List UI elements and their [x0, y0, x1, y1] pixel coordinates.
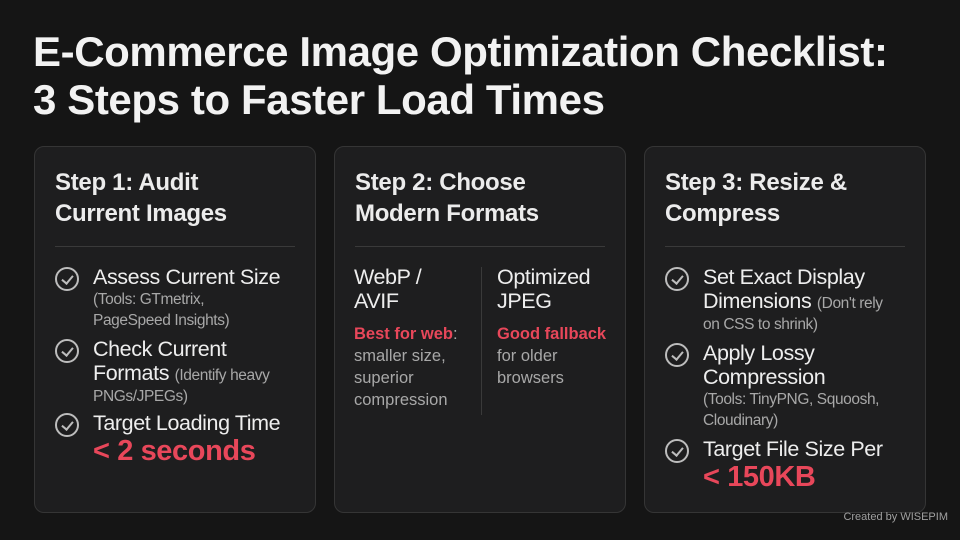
column: webp/avif: Best for web:	[354, 325, 458, 343]
step 3 heading: Compress	[665, 200, 780, 227]
column: optimized jpeg: browsers	[497, 369, 564, 387]
column: optimized jpeg: Good fallback	[497, 325, 606, 343]
item: target file size: < 150KB	[703, 461, 815, 493]
column: webp/avif: smaller size,	[354, 347, 446, 365]
column: optimized jpeg: JPEG	[497, 289, 552, 313]
item: check formats: Formats (Identify heavy	[93, 361, 269, 385]
step 2 heading: Modern Formats	[355, 200, 539, 227]
item: lossy compression: Compression	[703, 365, 825, 389]
column: optimized jpeg: Optimized	[497, 265, 590, 289]
item: target loading time: < 2 seconds	[93, 435, 255, 467]
item: assess size	[55, 265, 280, 329]
item: check formats	[55, 337, 270, 405]
item: assess size: PageSpeed Insights)	[93, 312, 229, 329]
column: webp/avif: AVIF	[354, 289, 399, 313]
column: webp/avif: compression	[354, 391, 448, 409]
column: optimized jpeg: for older	[497, 347, 558, 365]
panel: step 1	[34, 146, 316, 513]
column: optimized jpeg	[497, 265, 606, 387]
item: assess size: (Tools: GTmetrix,	[93, 291, 204, 308]
step 1 heading: Step 1: Audit	[55, 169, 198, 196]
item: target loading time: Target Loading Time	[93, 411, 280, 435]
step 1 heading	[55, 169, 227, 227]
step 2 heading: Step 2: Choose	[355, 169, 526, 196]
item: lossy compression: Apply Lossy	[703, 341, 815, 365]
item: check formats: Check Current	[93, 337, 226, 361]
item: display dimensions: Dimensions (Don't rely	[703, 289, 883, 313]
step 3 heading	[665, 169, 847, 227]
step 2 heading	[355, 169, 539, 227]
title	[33, 28, 888, 123]
item: target loading time	[55, 411, 280, 467]
column: webp/avif	[354, 265, 458, 409]
item: target file size: Target File Size Per	[703, 437, 883, 461]
item: display dimensions: on CSS to shrink)	[703, 316, 818, 333]
panel: step 2	[334, 146, 626, 513]
item: lossy compression	[665, 341, 879, 429]
item: display dimensions: Set Exact Display	[703, 265, 865, 289]
title: 3 Steps to Faster Load Times	[33, 76, 605, 123]
item: display dimensions	[665, 265, 883, 333]
title: E-Commerce Image Optimization Checklist:	[33, 28, 888, 75]
item: target file size	[665, 437, 883, 493]
credit: Created by WISEPIM	[843, 511, 948, 523]
step 1 heading: Current Images	[55, 200, 227, 227]
item: lossy compression: Cloudinary)	[703, 412, 778, 429]
item: check formats: PNGs/JPEGs)	[93, 388, 188, 405]
column: webp/avif: superior	[354, 369, 414, 387]
item: assess size: Assess Current Size	[93, 265, 280, 289]
column: webp/avif: WebP /	[354, 265, 421, 289]
step 3 heading: Step 3: Resize &	[665, 169, 847, 196]
item: lossy compression: (Tools: TinyPNG, Squoosh,	[703, 391, 879, 408]
panel: step 3	[644, 146, 926, 513]
